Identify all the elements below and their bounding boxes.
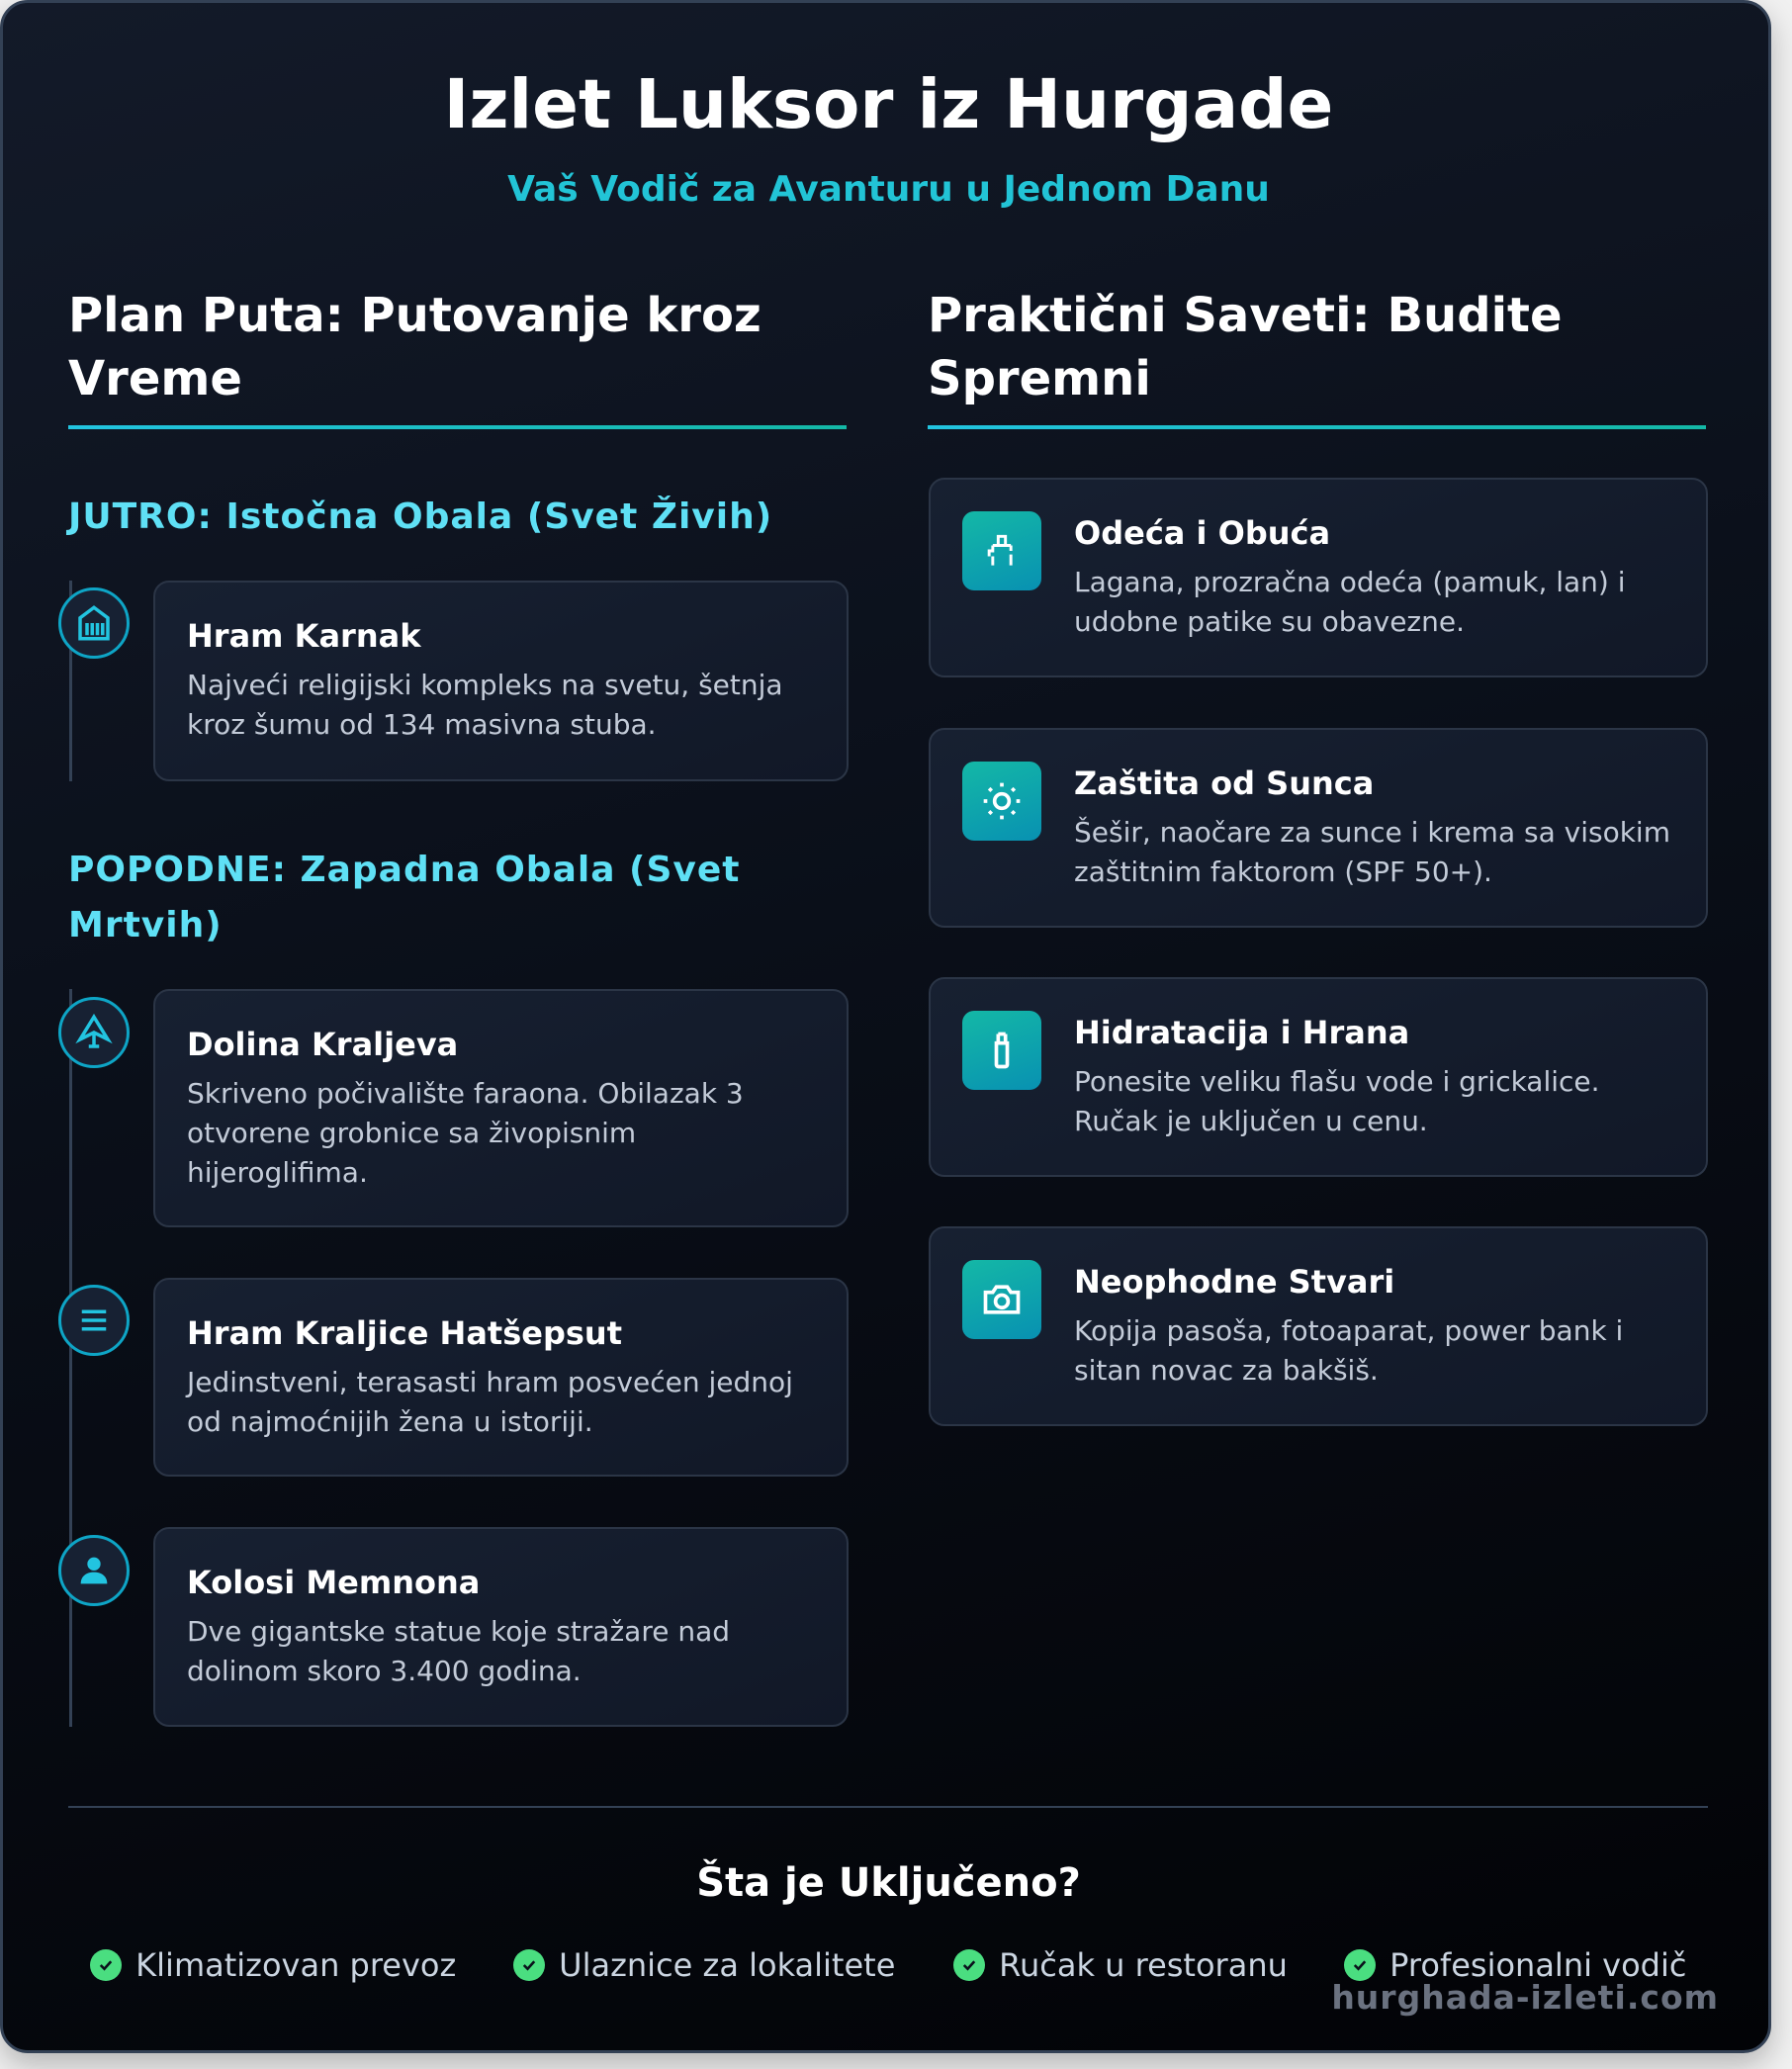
tip card: essentials: Kopija pasoša, fotoaparat, power bank i sitan novac za bakšiš.: [1074, 1314, 1623, 1387]
card: Dolina Kraljeva: Skriveno počivalište faraona. Obilazak 3 otvorene grobnice sa živopisnim hijeroglifima.: [187, 1077, 744, 1189]
card: Hram Karnak: [153, 581, 849, 781]
card: Hram Karnak: Najveći religijski kompleks na svetu, šetnja kroz šumu od 134 masivna stuba.: [187, 669, 783, 741]
item: tickets: Ulaznice za lokalitete: [559, 1946, 895, 1984]
title: Izlet Luksor iz Hurgade: [444, 65, 1333, 144]
card: Hatšepsut: Hram Kraljice Hatšepsut: [187, 1314, 622, 1352]
card: Dolina Kraljeva: Dolina Kraljeva: [187, 1026, 458, 1063]
card: Dolina Kraljeva: [153, 989, 849, 1227]
tip card: clothing: Lagana, prozračna odeća (pamuk, lan) i udobne patike su obavezne.: [1074, 566, 1626, 638]
tip card: water: [929, 977, 1708, 1177]
section heading: afternoon: POPODNE: Zapadna Obala (Svet Mrtvih): [68, 850, 740, 945]
icon: menu: [58, 1285, 130, 1356]
card: Kolosi Memnona: Kolosi Memnona: [187, 1564, 480, 1601]
tip card: essentials: [929, 1226, 1708, 1426]
tip card: water: Ponesite veliku flašu vode i grickalice. Ručak je uključen u cenu.: [1074, 1065, 1600, 1137]
card: Hatšepsut: Jedinstveni, terasasti hram posvećen jednoj od najmoćnijih žena u istoriji.: [187, 1366, 793, 1438]
item: lunch: Ručak u restoranu: [999, 1946, 1288, 1984]
tip card: sun: Zaštita od Sunca: [1074, 765, 1374, 802]
icon: temple: [58, 587, 130, 659]
subtitle: Vaš Vodič za Avanturu u Jednom Danu: [507, 169, 1270, 210]
card: Hram Karnak: Hram Karnak: [187, 617, 420, 655]
tip card: water: Hidratacija i Hrana: [1074, 1014, 1409, 1051]
section heading: morning: JUTRO: Istočna Obala (Svet Živih): [68, 496, 772, 537]
tip card: sun: [929, 728, 1708, 928]
tip card: clothing: [929, 478, 1708, 677]
tip card: clothing: Odeća i Obuća: [1074, 514, 1330, 552]
tip card: essentials: Neophodne Stvari: [1074, 1263, 1394, 1301]
included list: [90, 1946, 1686, 1984]
left column heading: Plan Puta: Putovanje kroz Vreme: [68, 288, 762, 406]
item: guide: Profesionalni vodič: [1389, 1946, 1686, 1984]
watermark: hurghada-izleti.com: [1331, 1978, 1719, 2017]
card: Hatšepsut: [153, 1278, 849, 1477]
card: Kolosi Memnona: [153, 1527, 849, 1727]
right column heading: Praktični Saveti: Budite Spremni: [928, 288, 1563, 406]
item: transport: Klimatizovan prevoz: [135, 1946, 456, 1984]
heading: included: Šta je Uključeno?: [696, 1860, 1081, 1906]
tip card: sun: Šešir, naočare za sunce i krema sa visokim zaštitnim faktorom (SPF 50+).: [1074, 816, 1670, 888]
icon: pyramid: [58, 997, 130, 1068]
card: Kolosi Memnona: Dve gigantske statue koje stražare nad dolinom skoro 3.400 godina.: [187, 1615, 730, 1687]
icon: person: [58, 1535, 130, 1606]
